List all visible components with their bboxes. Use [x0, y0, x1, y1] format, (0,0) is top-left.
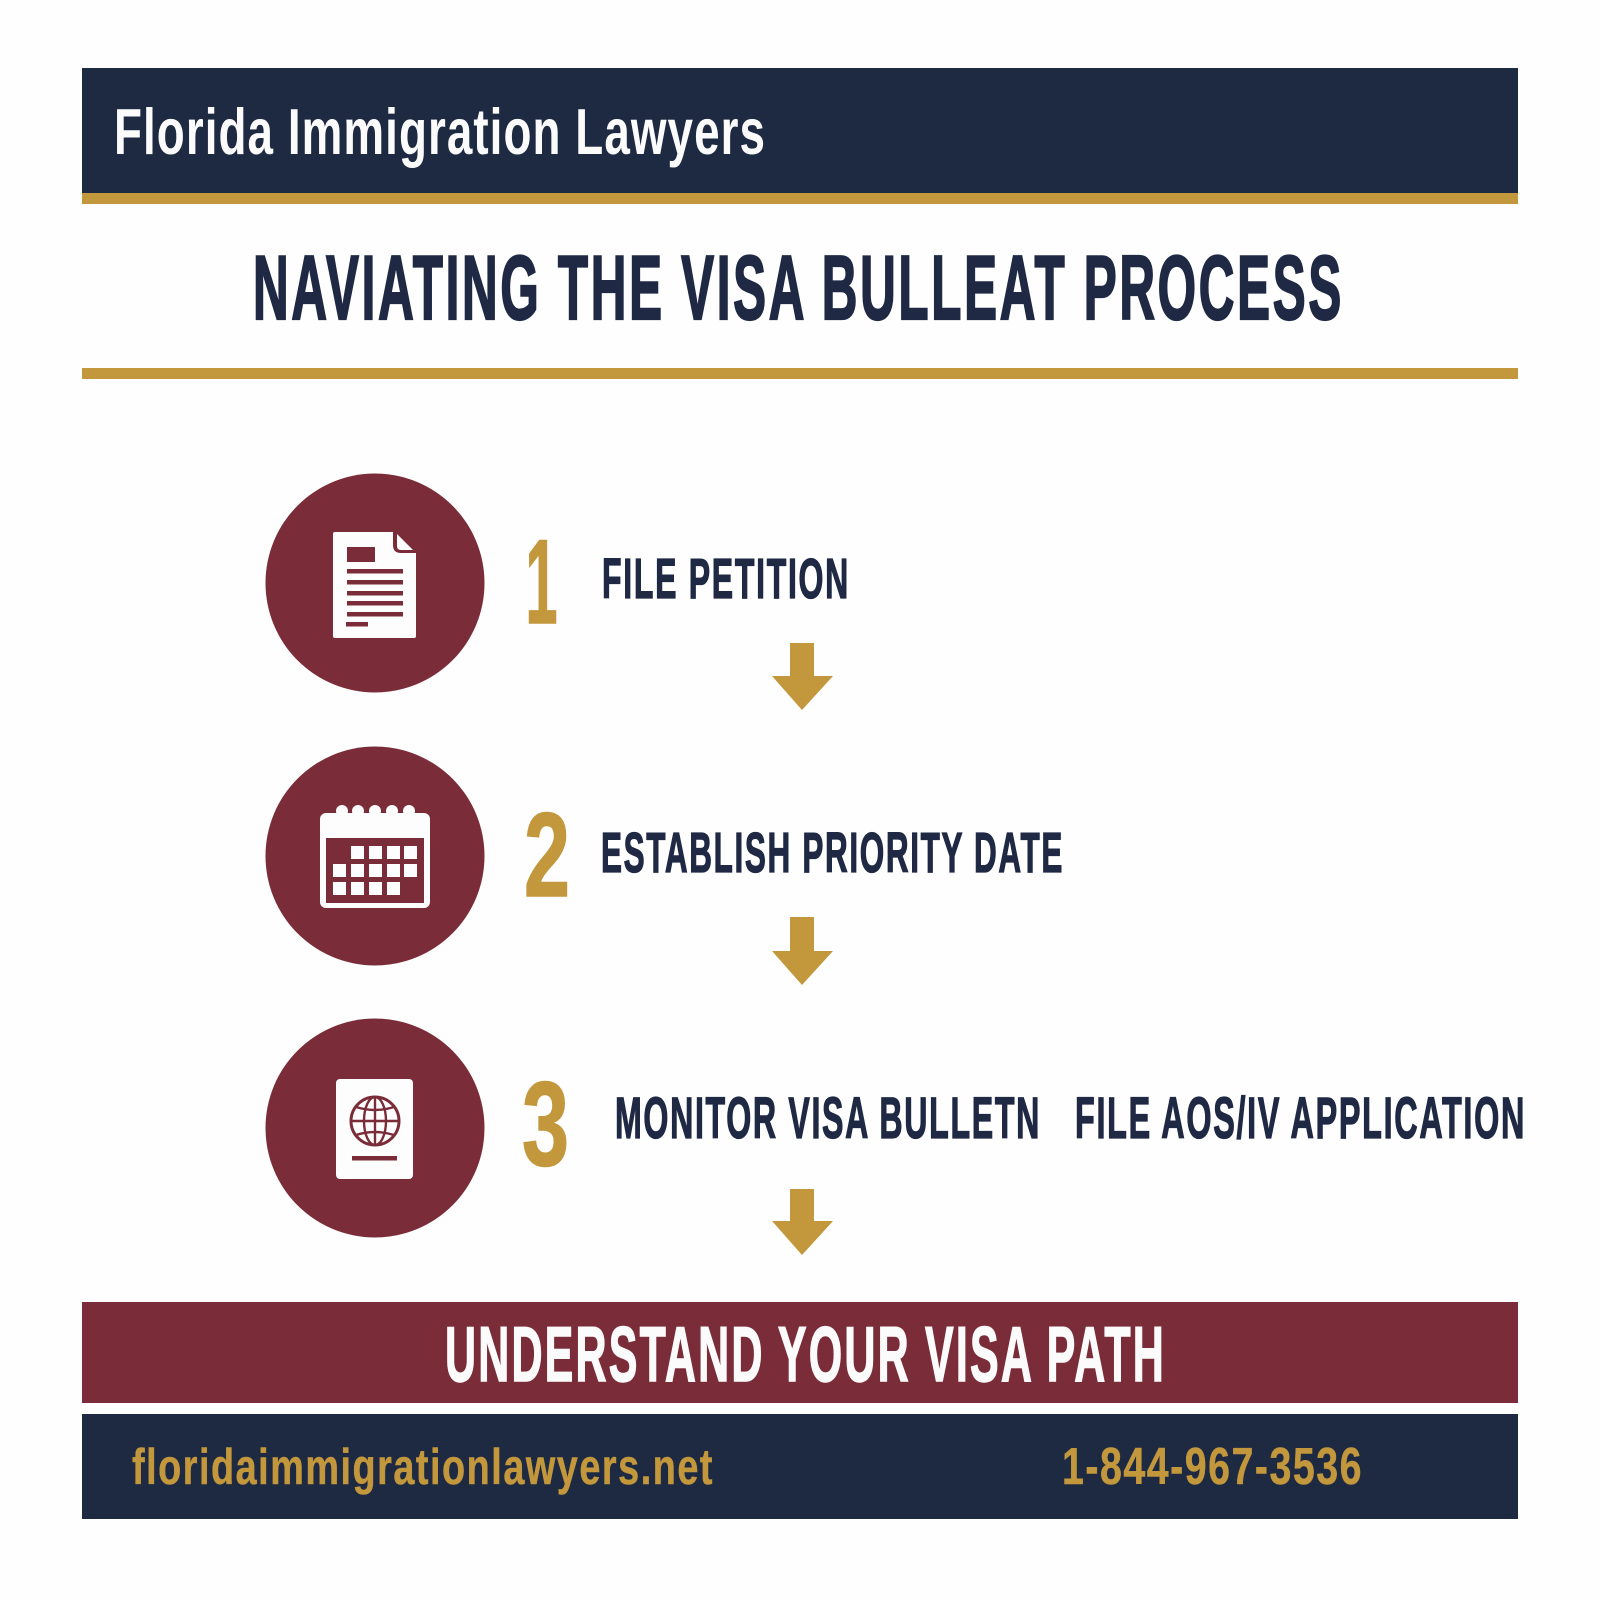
step 1 [266, 474, 850, 692]
icon: document [266, 474, 484, 692]
label: establish priority date: ESTABLISH PRIORITY DATE [601, 821, 1064, 885]
step 3 [266, 1018, 1526, 1238]
step 2 [266, 746, 1064, 966]
icon: calendar [266, 746, 484, 966]
icon: passport [266, 1018, 484, 1238]
arrow 1 [772, 643, 833, 710]
phone: 1-844-967-3536 [1062, 1438, 1363, 1496]
brand name: Florida Immigration Lawyers [114, 95, 766, 168]
call to action bar [82, 1302, 1518, 1403]
step 1: 1 [526, 515, 558, 649]
number 2: 2 [524, 788, 570, 922]
label: monitor visa bulletin: MONITOR VISA BULLETN [615, 1086, 1041, 1151]
footer bar [82, 1414, 1518, 1519]
title underline [82, 368, 1518, 379]
arrow 2 [772, 917, 833, 985]
header banner [82, 68, 1518, 204]
arrow 3 [772, 1189, 833, 1255]
label: file petition: FILE PETITION [602, 547, 850, 611]
number 3: 3 [522, 1057, 569, 1191]
website: floridaimmigrationlawyers.net [132, 1439, 714, 1495]
